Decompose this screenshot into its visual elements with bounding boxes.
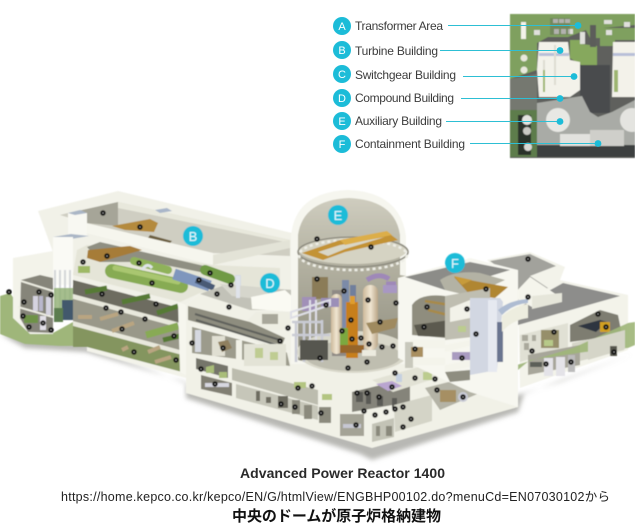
marker E: E: [334, 208, 343, 223]
rooms level 2: [196, 358, 228, 378]
leader D: [461, 95, 563, 102]
rooms level 1: [192, 326, 290, 366]
leader E: [446, 118, 563, 125]
right roof lower: [518, 283, 620, 325]
leader C: [463, 73, 577, 80]
marker D: [260, 273, 280, 293]
central block body: [186, 293, 518, 448]
right interior rooms: [520, 323, 568, 362]
legend item A: [333, 17, 443, 35]
compound upper deck: [200, 286, 295, 310]
containment dome: [291, 190, 409, 373]
site plan: turbine building: [537, 42, 580, 97]
side block roof: [405, 262, 510, 290]
legend item C: C: [338, 69, 346, 81]
tower: [68, 213, 87, 237]
marker F: F: [451, 256, 459, 271]
green ground left: [0, 293, 100, 346]
right low rooms: [352, 378, 410, 412]
interior floors: [445, 288, 490, 340]
compound and central low block: [186, 276, 518, 448]
crossbeam: [86, 223, 213, 265]
legend item C: [333, 65, 456, 83]
site plan: lawns: [510, 14, 635, 79]
leader lines with dots: [440, 22, 601, 147]
tower stripes: [55, 270, 70, 308]
reactor equipment: [291, 276, 403, 362]
side block white mass: [398, 258, 518, 407]
marker E: [328, 205, 348, 225]
legend item B: B: [338, 45, 346, 57]
ring crane: [299, 236, 407, 264]
right building body: [487, 252, 628, 388]
containment side building: [398, 258, 528, 407]
left annex: [13, 251, 73, 334]
dome interior: [298, 198, 407, 366]
site plan aerial map: [510, 14, 635, 158]
green band right: [460, 322, 635, 390]
legend item B: Turbine Building: [355, 44, 438, 58]
crane in bay: [454, 277, 508, 298]
floor disc: [297, 331, 409, 373]
legend item E: E: [338, 116, 346, 128]
legend item D: D: [338, 93, 346, 105]
upper crane: [112, 219, 158, 232]
turbine floors section: [73, 280, 186, 372]
leader A: [448, 22, 581, 29]
turbine hall outer shell: [38, 191, 292, 375]
legend item F: [333, 135, 465, 153]
blue tower: [470, 298, 503, 375]
side cutaway room: [412, 295, 445, 338]
legend item C: Switchgear Building: [355, 68, 456, 82]
legend item E: [333, 112, 442, 130]
marker D: D: [265, 276, 275, 291]
legend item A: A: [338, 21, 346, 33]
turbine building: [38, 191, 292, 378]
reference dots: [9, 213, 614, 427]
marker B: [183, 226, 203, 246]
polar crane: [302, 232, 398, 260]
pipe gallery: [188, 306, 285, 345]
legend item D: [333, 89, 454, 107]
caption title: Advanced Power Reactor 1400: [240, 465, 445, 481]
leader F: [470, 140, 601, 147]
hall end wall: [178, 302, 186, 375]
dome outer shell: [291, 190, 406, 364]
rooms level 3: [201, 375, 232, 396]
reactor plant cutaway illustration: [0, 190, 635, 460]
site plan: reactor block: [537, 96, 635, 145]
rooms over band: [588, 330, 625, 360]
leader B: [440, 47, 563, 54]
legend item F: Containment Building: [355, 137, 465, 151]
site plan: transformers: [534, 19, 630, 44]
floor piping green: [85, 288, 180, 340]
auxiliary building right: [460, 252, 635, 390]
site plan: tanks: [518, 115, 531, 155]
compound box: [251, 290, 296, 312]
legend item D: Compound Building: [355, 91, 454, 105]
right roof upper: [490, 254, 556, 300]
site plan: second unit: [612, 42, 635, 97]
marker F: [445, 253, 465, 273]
japanese caption: 中央のドームが原子炉格納建物: [232, 507, 441, 525]
legend item F: F: [339, 139, 346, 151]
legend item A: Transformer Area: [355, 19, 443, 33]
interior hall: [73, 245, 280, 302]
legend: building key: [333, 17, 465, 153]
green turbines and condensers: [78, 261, 241, 291]
marker B: B: [189, 229, 197, 244]
legend item B: [333, 41, 438, 59]
lower crane: [87, 246, 142, 262]
turbine hall back wall: [60, 202, 290, 256]
source url: https://home.kepco.co.kr/kepco/EN/G/htmlView/ENGBHP00102.do?menuCd=EN07030102から: [61, 490, 610, 504]
ground shadows: [0, 334, 632, 460]
legend item E: Auxiliary Building: [355, 114, 442, 128]
